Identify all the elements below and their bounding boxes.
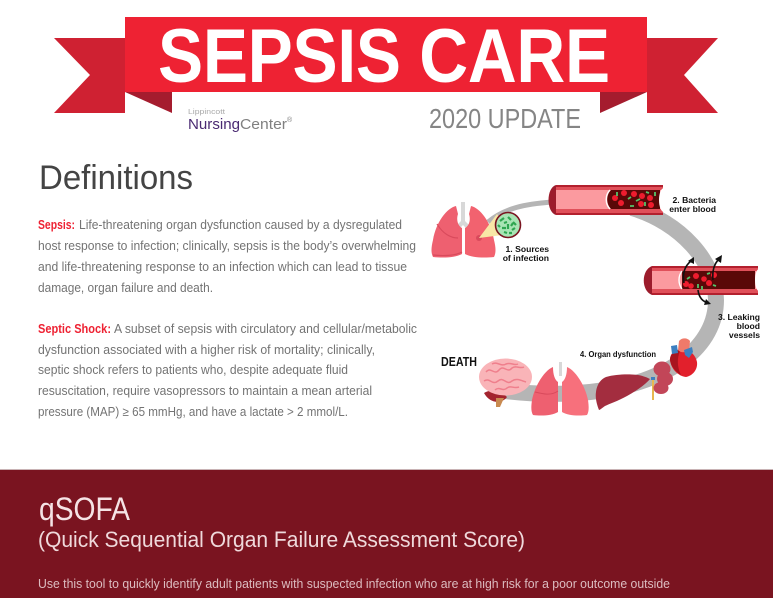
logo: Lippincott NursingCenter [188, 107, 293, 133]
label: leaking blood vessels: blood [737, 321, 760, 331]
description: Use this tool to quickly identify adult patients with suspected infection who are at high risk for a poor outcome outside [38, 577, 670, 591]
arrows: leaking from vessel [683, 255, 722, 305]
gray pathway arc [488, 202, 716, 394]
heading: definitions: Definitions [39, 159, 193, 197]
text block: septic shock definition: septic shock refers to patients who, despite adequate fluid [38, 363, 348, 377]
logo: Lippincott NursingCenter: Center [240, 116, 287, 133]
label: bacteria enter blood: enter blood [669, 204, 716, 214]
left ribbon tail [54, 38, 125, 113]
text block: septic shock definition: dysfunction associated with a higher risk of mortality; clinically, [38, 343, 375, 357]
label: bacteria enter blood: 2. Bacteria [673, 195, 716, 205]
heading: qSOFA: qSOFA [39, 491, 131, 527]
label: sources of infection: 1. Sources [506, 244, 549, 254]
kidney [651, 362, 673, 400]
right ribbon tail [647, 38, 718, 113]
label: bacteria enter blood [669, 195, 716, 214]
label: leaking blood vessels [718, 312, 760, 340]
text block: sepsis definition: and life-threatening response to an infection which can lead to tissue [38, 260, 407, 274]
text block: septic shock definition: pressure (MAP) ≥ 65 mmHg, and have a lactate > 2 mmol/L. [38, 405, 348, 419]
subheading: full name: (Quick Sequential Organ Failure Assessment Score) [38, 527, 525, 552]
label: leaking blood vessels: 3. Leaking [718, 312, 760, 322]
liver [596, 374, 650, 410]
subtitle: 2020 update: 2020 UPDATE [429, 103, 581, 134]
logo: Lippincott NursingCenter: Nursing [188, 116, 240, 133]
logo: Lippincott NursingCenter: ® [287, 116, 293, 124]
panel: qSOFA [0, 469, 773, 598]
text block: sepsis definition [38, 218, 416, 295]
blood vessel: bacteria enter blood [548, 185, 669, 215]
logo: Lippincott NursingCenter: Lippincott [188, 107, 226, 116]
label: death: DEATH [441, 355, 477, 369]
banner main panel [125, 17, 647, 92]
brain [479, 358, 532, 407]
label: leaking blood vessels: vessels [729, 330, 760, 340]
text block: septic shock definition: A subset of sepsis with circulatory and cellular/metabolic [114, 322, 417, 336]
left ribbon fold [125, 92, 172, 113]
text block: septic shock definition [38, 322, 417, 419]
text block: sepsis definition: Sepsis: [38, 218, 75, 232]
text block: sepsis definition: damage, organ failure and death. [38, 281, 213, 295]
text block: sepsis definition: host response to infection; clinically, sepsis is the body’s overwhelming [38, 239, 416, 253]
lungs: source of infection [432, 202, 496, 258]
right ribbon fold [600, 92, 647, 113]
label: sources of infection [503, 244, 549, 263]
infection magnifier with bacteria [479, 212, 520, 238]
sepsis progression illustration [432, 185, 763, 416]
label: organ dysfunction: 4. Organ dysfunction [580, 349, 656, 359]
blood vessel: leaking blood vessels [644, 266, 763, 295]
label: sources of infection: of infection [503, 253, 549, 263]
text block: sepsis definition: Life-threatening organ dysfunction caused by a dysregulated [79, 218, 402, 232]
title: SEPSIS CARE [158, 14, 610, 99]
text block: septic shock definition: Septic Shock: [38, 322, 111, 336]
banner [54, 14, 718, 113]
lungs: failing organ [531, 362, 589, 416]
heart [670, 338, 697, 377]
text block: septic shock definition: resuscitation, require vasopressors to maintain a mean arterial [38, 384, 372, 398]
